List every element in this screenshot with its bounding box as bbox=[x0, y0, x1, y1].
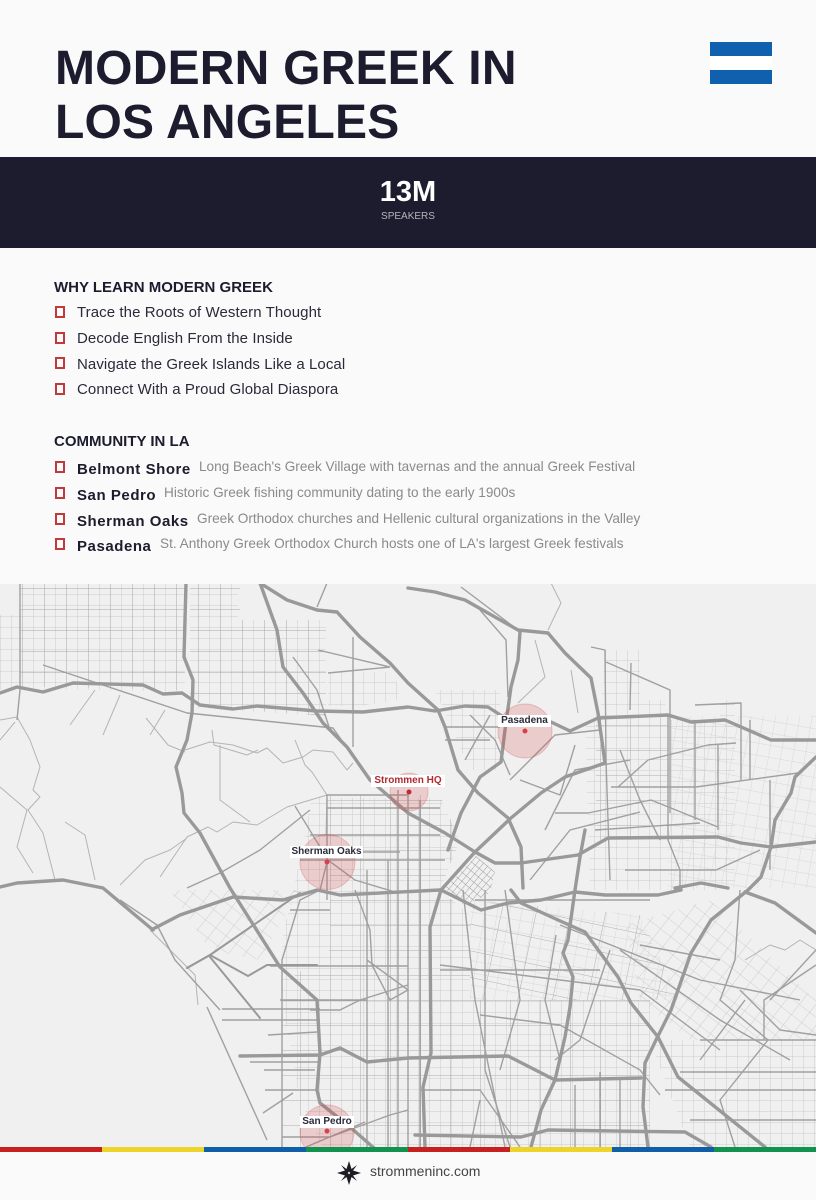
title: MODERN GREEK IN bbox=[55, 42, 517, 95]
secondary highways bbox=[187, 893, 317, 1018]
community: San Pedro: San Pedro bbox=[77, 487, 156, 504]
label: Pasadena: Pasadena bbox=[501, 715, 548, 726]
icon: flag bbox=[710, 42, 772, 84]
community: Sherman Oaks bbox=[55, 511, 640, 530]
icon: company logo bbox=[337, 1161, 361, 1185]
title: LOS ANGELES bbox=[55, 96, 399, 149]
heading: why learn: WHY LEARN MODERN GREEK bbox=[54, 279, 273, 296]
stat band bbox=[0, 157, 816, 248]
map of Los Angeles bbox=[0, 584, 816, 1147]
map panel bbox=[0, 583, 816, 1149]
list: communities bbox=[55, 459, 640, 555]
street grids bbox=[0, 584, 816, 1147]
community: Pasadena: St. Anthony Greek Orthodox Church hosts one of LA's largest Greek festivals bbox=[160, 536, 624, 551]
list: reasons bbox=[55, 304, 345, 398]
label: Sherman Oaks: Sherman Oaks bbox=[291, 846, 362, 857]
title bbox=[55, 42, 517, 149]
color strip bbox=[0, 1147, 816, 1152]
arterial roads bbox=[17, 583, 816, 1147]
community: Belmont Shore bbox=[55, 459, 635, 478]
freeways bbox=[0, 583, 816, 1149]
community: San Pedro: Historic Greek fishing community dating to the early 1900s bbox=[164, 485, 515, 500]
footer url: strommeninc.com bbox=[370, 1163, 480, 1179]
heading: community: COMMUNITY IN LA bbox=[54, 433, 190, 450]
community: San Pedro bbox=[55, 485, 515, 504]
reason 2: Decode English From the Inside bbox=[77, 330, 293, 347]
community: Pasadena: Pasadena bbox=[77, 538, 151, 555]
stat: speakers label: SPEAKERS bbox=[381, 211, 435, 222]
stat: speakers value: 13M bbox=[380, 176, 436, 208]
community: Belmont Shore: Long Beach's Greek Village with tavernas and the annual Greek Festival bbox=[199, 459, 635, 474]
label: San Pedro: San Pedro bbox=[302, 1116, 352, 1127]
reason 1: Trace the Roots of Western Thought bbox=[77, 304, 321, 321]
community: Sherman Oaks: Sherman Oaks bbox=[77, 513, 189, 530]
reason 3: Navigate the Greek Islands Like a Local bbox=[77, 356, 345, 373]
community: Pasadena bbox=[55, 536, 624, 555]
community: Belmont Shore: Belmont Shore bbox=[77, 461, 191, 478]
local hills and canyon roads bbox=[0, 583, 816, 1005]
reason 4: Connect With a Proud Global Diaspora bbox=[77, 381, 338, 398]
label: Strommen HQ: Strommen HQ bbox=[374, 775, 442, 786]
community: Sherman Oaks: Greek Orthodox churches and Hellenic cultural organizations in the Valley bbox=[197, 511, 640, 526]
